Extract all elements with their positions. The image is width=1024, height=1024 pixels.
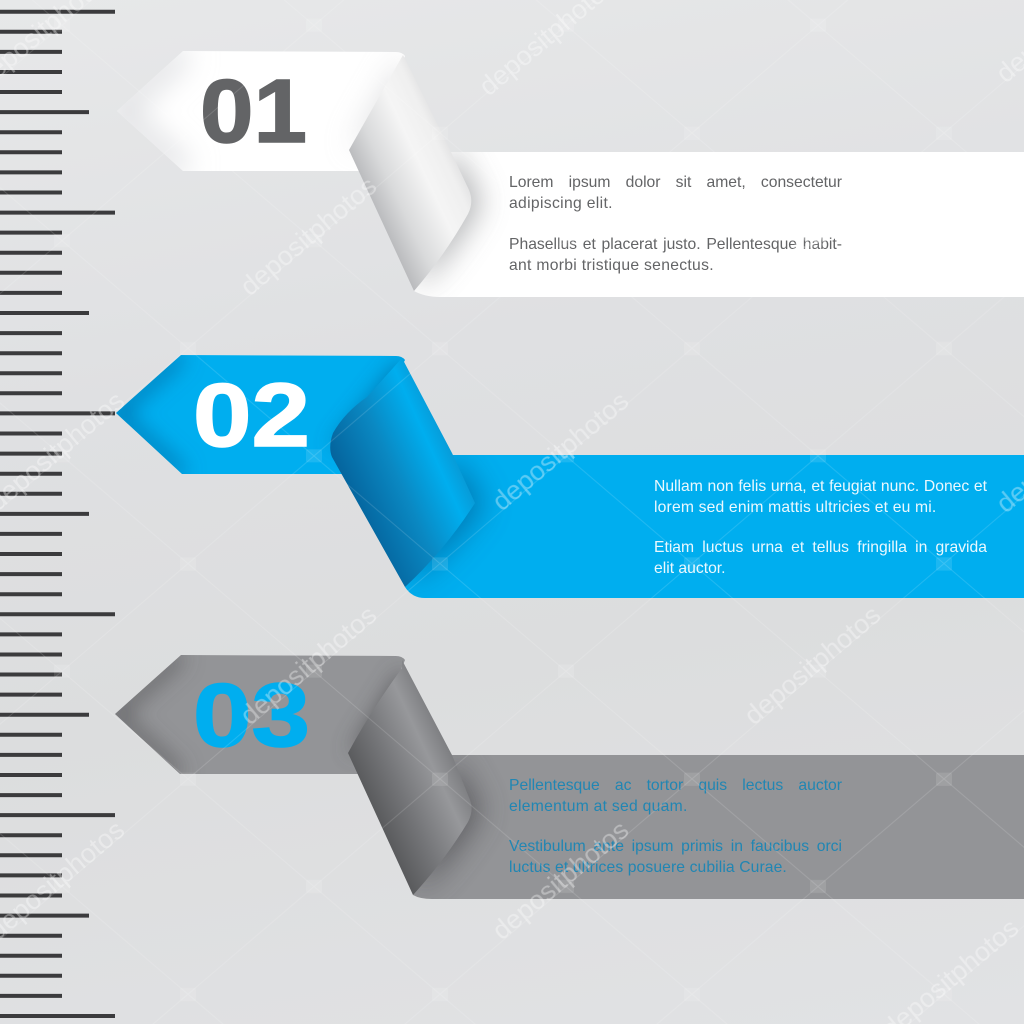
fold 02 <box>330 358 475 587</box>
watermark overlay: depositphotos <box>234 171 382 302</box>
panel: ribbon 03 <box>115 655 1024 899</box>
lower band 02 <box>405 453 1024 598</box>
text block 03: elementum at sed quam. <box>509 798 688 815</box>
text block 01 <box>509 174 842 274</box>
arrow head 03 <box>115 655 430 774</box>
text block 01: adipiscing elit. <box>509 195 613 212</box>
text block 01: ant morbi tristique senectus. <box>509 257 714 274</box>
text block 02: Nullam non felis urna, et feugiat nunc. Donec et <box>654 478 987 495</box>
watermark overlay: depositphotos <box>738 171 886 302</box>
text block 02: lorem sed enim mattis ultricies et eu mi. <box>654 499 936 516</box>
fold 03 <box>348 660 472 895</box>
fold 01 <box>349 55 471 291</box>
text block 03: luctus et ultrices posuere cubilia Curae. <box>509 859 787 876</box>
text block 01: Lorem ipsum dolor sit amet, consectetur <box>509 174 842 191</box>
lower band 03 <box>413 755 1024 899</box>
number 02: 02 <box>193 366 310 466</box>
panel: ribbon 02 <box>116 355 1024 598</box>
text block 03 <box>509 777 842 876</box>
lower band 01 <box>414 143 1024 297</box>
arrow head 02 <box>116 355 430 474</box>
text block 03: Pellentesque ac tortor quis lectus auctor <box>509 777 842 794</box>
number 03: 03 <box>193 666 310 766</box>
ruler scale <box>0 10 115 1018</box>
panel: ribbon 01 <box>142 51 1024 297</box>
text block 02: Etiam luctus urna et tellus fringilla in gravida <box>654 539 987 556</box>
arrow head 01 <box>142 51 405 171</box>
number 01: 01 <box>200 62 307 162</box>
text block 02: elit auctor. <box>654 560 726 577</box>
text block 02 <box>654 478 987 577</box>
watermark overlay: depositphotos <box>738 600 886 731</box>
watermark overlay: depositphotos <box>234 600 382 731</box>
text block 01: Phasellus et placerat justo. Pellentesque habit- <box>509 236 842 253</box>
text block 03: Vestibulum ante ipsum primis in faucibus orci <box>509 838 842 855</box>
watermark overlay: depositphotos <box>486 386 634 517</box>
watermark overlay: depositphotos <box>486 815 634 946</box>
